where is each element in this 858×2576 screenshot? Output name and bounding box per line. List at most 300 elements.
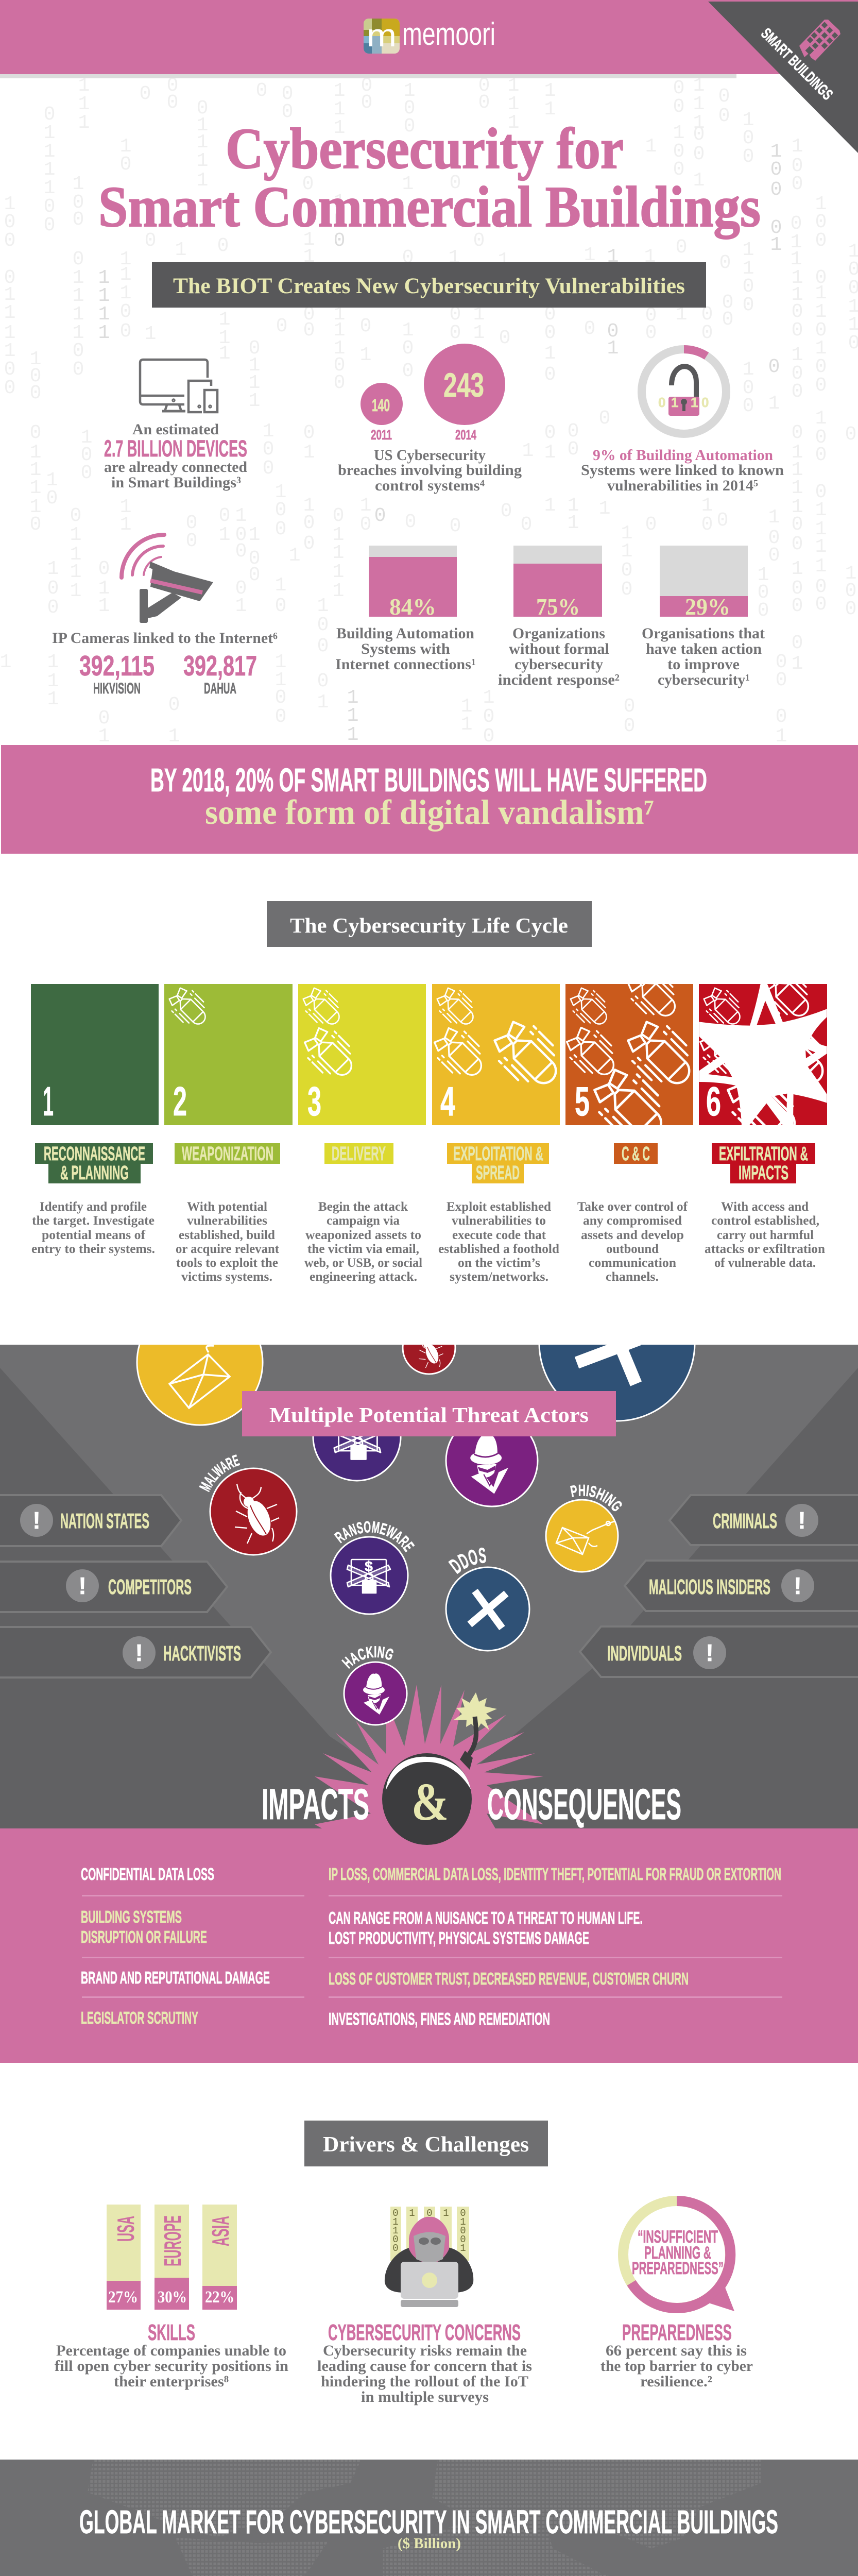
- row: legislator scrutiny: [81, 2008, 550, 2028]
- logo: memoori: [364, 16, 495, 54]
- tag: nation states: [0, 1495, 181, 1546]
- tag: nation states: NATION STATES: [60, 1509, 149, 1533]
- tag: hacktivists: HACKTIVISTS: [163, 1641, 241, 1665]
- binary code background: 0111100: [4, 267, 15, 399]
- panel: 6 exfiltration: of vulnerable data.: [714, 1256, 816, 1270]
- panel: 1 reconnaissance: entry to their systems.: [31, 1242, 155, 1256]
- tag: hacktivists: !: [135, 1639, 143, 1666]
- bar: no incident response 75%: 75%: [536, 594, 580, 620]
- binary code background: 0: [302, 173, 314, 195]
- panel: 5 command and control: Take over control of: [577, 1200, 688, 1214]
- panel: preparedness: the top barrier to cyber: [600, 2358, 753, 2375]
- panel: 6 exfiltration: control established,: [711, 1214, 819, 1228]
- binary code background: 0111100: [792, 422, 803, 555]
- binary code background: 1: [498, 249, 509, 272]
- binary code background: 011110: [30, 422, 41, 536]
- binary code background: 0: [334, 230, 345, 252]
- binary code background: 0111100: [815, 481, 827, 616]
- chart: skills bars: USA: [112, 2216, 139, 2242]
- binary code background: 0111100: [73, 248, 84, 381]
- binary code background: 0: [584, 318, 595, 340]
- panel: 4 exploitation: EXPLOITATION &: [453, 1143, 543, 1165]
- panel: 4 exploitation: vulnerabilities to: [452, 1214, 546, 1228]
- binary code background: 00: [167, 75, 178, 114]
- panel: preparedness: PREPAREDNESS: [622, 2320, 732, 2345]
- heading: impacts and consequences: [262, 1772, 681, 1832]
- binary code background: 10001: [770, 141, 782, 256]
- bar: taken action 29%: have taken action: [646, 640, 762, 657]
- binary code background: 100: [743, 109, 754, 168]
- threat: hacking circle behind title: [446, 1415, 538, 1506]
- banner: digital vandalism: some form of digital vandalism⁷: [205, 792, 654, 832]
- bar: no incident response 75%: cybersecurity: [514, 656, 603, 673]
- tag: individuals: [580, 1626, 858, 1677]
- panel: threat actors section: [0, 1345, 858, 1828]
- row: building systems disruption: DISRUPTION OR FAILURE: [81, 1927, 207, 1946]
- stat: building automation lock gauge: 9% of Building Automation: [593, 447, 773, 464]
- heading: threat actors: [242, 1391, 616, 1436]
- binary code background: 111: [78, 75, 90, 134]
- panel: 4 exploitation: [428, 984, 570, 1284]
- icon: hacker with laptop: 1: [409, 2208, 415, 2219]
- bar: no incident response 75%: Organizations: [512, 625, 605, 642]
- threat: top malware circle: [402, 1345, 456, 1375]
- binary code background: 1: [402, 173, 414, 195]
- panel: 3 delivery: the victim via email,: [307, 1242, 419, 1256]
- chart: skills bars: 22%: [205, 2288, 234, 2307]
- panel: 3 delivery: Begin the attack: [318, 1200, 408, 1214]
- binary code background: 1: [0, 651, 11, 673]
- binary code background: 1: [645, 135, 657, 158]
- threat: hacking: HACKING: [341, 1646, 393, 1669]
- binary code background: 1: [544, 495, 556, 517]
- threat: ddos: DDOS: [448, 1548, 486, 1574]
- stat: IP cameras: 392,817: [183, 650, 257, 682]
- binary code background: 0: [374, 505, 386, 527]
- binary code background: 0: [499, 327, 510, 349]
- binary code background: 0: [676, 236, 687, 259]
- title: Smart Commercial Buildings: [98, 175, 761, 239]
- corner tab: smart buildings: [708, 2, 858, 153]
- stat: breaches bubble chart: US Cybersecurity: [374, 447, 486, 464]
- bar: no incident response 75%: [498, 546, 620, 688]
- binary code background: 0: [450, 172, 461, 194]
- binary code background: 1: [584, 244, 595, 266]
- panel: cybersecurity concerns: hindering the rollout of the IoT: [321, 2373, 528, 2390]
- row: legislator scrutiny: LEGISLATOR SCRUTINY: [81, 2008, 198, 2027]
- binary code background: 01111: [333, 505, 344, 602]
- panel: 5 command and control: channels.: [606, 1270, 659, 1284]
- panel: 4 exploitation: established a foothold: [438, 1242, 559, 1256]
- panel: 6 exfiltration: IMPACTS: [739, 1162, 788, 1184]
- icon: speech bubble: PLANNING &: [644, 2243, 711, 2263]
- binary code background: 11: [568, 495, 579, 534]
- binary code background: 01: [168, 694, 180, 748]
- binary code background: 111: [334, 80, 345, 139]
- panel: 6 exfiltration: 6: [706, 1078, 721, 1124]
- panel: skills: their enterprises⁸: [114, 2373, 229, 2390]
- heading: life cycle: The Cybersecurity Life Cycle: [290, 913, 568, 937]
- threat: hacking: [341, 1646, 408, 1726]
- row: building systems disruption: CAN RANGE FROM A NUISANCE TO A THREAT TO HUMAN LIFE.: [329, 1908, 643, 1927]
- logo: memoori: memoori: [402, 16, 495, 52]
- binary code background: 10010: [275, 481, 286, 617]
- panel: 6 exfiltration: With access and: [721, 1200, 809, 1214]
- binary code background: 01: [360, 315, 371, 366]
- binary code background: 00: [645, 304, 657, 344]
- bar: internet connections 84%: Internet connections¹: [335, 656, 476, 673]
- tag: nation states: !: [32, 1507, 41, 1534]
- tag: criminals: [670, 1495, 858, 1545]
- panel: 1 reconnaissance: potential means of: [42, 1228, 146, 1242]
- binary code background: 00100: [673, 77, 684, 181]
- binary code background: 0: [402, 247, 414, 269]
- binary code background: 11100: [120, 248, 131, 343]
- binary code background: 1100100: [792, 267, 803, 403]
- panel: 4 exploitation: Exploit established: [447, 1200, 551, 1214]
- panel: 2 weaponization: With potential: [187, 1200, 267, 1214]
- threat: top ddos circle: [539, 1345, 695, 1422]
- heading: BIOT vulnerabilities: [152, 262, 706, 308]
- threat: malware: [199, 1454, 298, 1556]
- binary code background: 01111: [197, 97, 208, 192]
- binary code background: 0: [276, 315, 287, 337]
- binary code background: 1: [449, 247, 460, 269]
- tag: malicious insiders: [625, 1561, 858, 1611]
- binary code background: 0: [768, 356, 780, 378]
- panel: 3 delivery: engineering attack.: [310, 1270, 417, 1284]
- panel: global market: ($ Billion): [398, 2536, 461, 2552]
- binary code background: 100: [317, 595, 329, 657]
- row: brand damage: BRAND AND REPUTATIONAL DAMAGE: [81, 1968, 270, 1987]
- binary code background: 11: [461, 696, 472, 736]
- binary code background: 100: [815, 193, 827, 252]
- binary code background: 00: [624, 696, 635, 737]
- binary code background: 10001: [235, 505, 247, 617]
- binary code background: 00: [361, 75, 372, 114]
- binary code background: 111: [508, 75, 519, 134]
- binary code background: 100: [4, 193, 15, 252]
- binary code background: 111001: [693, 75, 705, 192]
- panel: skills: [55, 2205, 288, 2390]
- icon: hacker with laptop: 01001: [460, 2208, 466, 2254]
- binary code background: 0: [145, 230, 156, 252]
- tag: competitors: !: [78, 1572, 87, 1599]
- binary code background: 100: [402, 319, 414, 382]
- stat: breaches bubble chart: control systems⁴: [375, 477, 485, 494]
- heading: BIOT vulnerabilities: The BIOT Creates New Cybersecurity Vulnerabilities: [173, 274, 685, 298]
- bar: taken action 29%: to improve: [667, 656, 740, 673]
- panel: 5 command and control: outbound: [606, 1242, 659, 1256]
- panel: cybersecurity concerns: in multiple surveys: [361, 2388, 489, 2405]
- heading: impacts and consequences: IMPACTS: [262, 1780, 369, 1828]
- threat: ransomware: $: [365, 1558, 373, 1574]
- binary code background: 0100: [743, 294, 754, 417]
- binary code background: 100: [263, 420, 274, 480]
- stat: breaches bubble chart: 243: [443, 366, 484, 404]
- binary code background: 1: [175, 239, 186, 261]
- panel: cybersecurity concerns: leading cause for concern that is: [317, 2358, 532, 2375]
- stat: connected devices: [104, 360, 247, 491]
- binary code background: 0111100: [44, 104, 55, 236]
- threat: ddos: [445, 1548, 530, 1652]
- panel: 5 command and control: C & C: [622, 1143, 650, 1165]
- binary code background: 00: [478, 75, 490, 114]
- panel: preparedness: [600, 2201, 753, 2390]
- binary code background: 00: [303, 303, 315, 342]
- binary code background: 10: [701, 495, 713, 536]
- panel: 4 exploitation: on the victim’s: [458, 1256, 540, 1270]
- panel: 6 exfiltration: carry out harmful: [717, 1228, 814, 1242]
- heading: impacts and consequences: CONSEQUENCES: [487, 1780, 681, 1828]
- stat: building automation lock gauge: 0: [701, 395, 709, 410]
- world map pattern: [88, 2460, 761, 2576]
- panel: 2 weaponization: WEAPONIZATION: [182, 1143, 273, 1165]
- stat: building automation lock gauge: vulnerabilities in 2014⁵: [607, 477, 758, 494]
- stat: building automation lock gauge: 0: [658, 395, 665, 410]
- tag: criminals: !: [798, 1507, 806, 1534]
- panel: 4 exploitation: 4: [440, 1078, 455, 1124]
- stat: building automation lock gauge: Systems were linked to known: [581, 462, 784, 479]
- binary code background: 11: [120, 496, 131, 536]
- binary code background: 1: [768, 393, 780, 415]
- heading: life cycle: [267, 901, 592, 947]
- icon: speech bubble: “INSUFFICIENT: [638, 2227, 718, 2247]
- panel: 5 command and control: any compromised: [583, 1214, 682, 1228]
- binary code background: 01: [544, 422, 556, 464]
- panel: 2 weaponization: [164, 984, 293, 1284]
- binary code background: 11: [544, 80, 556, 121]
- icon: camera: [122, 535, 213, 623]
- panel: cybersecurity concerns: Cybersecurity risks remain the: [323, 2342, 527, 2359]
- panel: 5 command and control: communication: [589, 1256, 676, 1270]
- panel: 5 command and control: [565, 984, 693, 1281]
- binary code background: 100: [73, 173, 84, 231]
- binary code background: 1: [145, 323, 156, 345]
- stat: breaches bubble chart: [338, 344, 522, 494]
- tag: individuals: !: [706, 1639, 714, 1666]
- binary code background: 100: [303, 495, 315, 555]
- binary code background: 011: [98, 558, 110, 617]
- panel: 1 reconnaissance: & PLANNING: [60, 1162, 129, 1184]
- row: building systems disruption: [81, 1907, 782, 1958]
- binary code background: 01: [303, 422, 315, 464]
- binary code background: 01111: [70, 505, 81, 602]
- bar: taken action 29%: 29%: [685, 594, 730, 620]
- panel: 2 weaponization: established, build: [179, 1228, 275, 1242]
- binary code background: 100: [758, 564, 769, 622]
- bar: taken action 29%: cybersecurity¹: [658, 671, 750, 688]
- chart: skills bars: [107, 2205, 237, 2310]
- panel: impacts and consequences: [0, 1692, 858, 2063]
- threat: phishing: [545, 1485, 622, 1572]
- binary code background: 100: [792, 135, 803, 195]
- stat: breaches bubble chart: breaches involving building: [338, 462, 522, 479]
- binary code background: 100: [249, 524, 260, 586]
- binary code background: 1100: [743, 239, 754, 316]
- stat: IP cameras: 392,115: [79, 650, 155, 682]
- bar: taken action 29%: [642, 546, 765, 688]
- bar: taken action 29%: Organisations that: [642, 625, 765, 642]
- panel: skills: fill open cyber security positions in: [55, 2358, 288, 2375]
- binary code background: 00: [722, 292, 733, 331]
- binary code background: 10: [334, 191, 345, 231]
- binary code background: 00: [450, 303, 461, 344]
- panel: 1 reconnaissance: the target. Investigate: [32, 1214, 155, 1228]
- threat: ransomware circle behind title: [313, 1393, 401, 1481]
- icon: building: [799, 20, 840, 61]
- panel: 6 exfiltration: [699, 984, 827, 1267]
- heading: impacts and consequences: &: [411, 1772, 449, 1832]
- panel: 2 weaponization: 2: [173, 1078, 187, 1124]
- binary code background: 0111: [249, 337, 260, 412]
- icon: hacker with laptop: [385, 2207, 473, 2307]
- panel: 5 command and control: assets and develop: [581, 1228, 684, 1242]
- stat: connected devices: An estimated: [132, 421, 219, 438]
- panel: 3 delivery: 3: [307, 1078, 321, 1124]
- threat: ransomware: [330, 1521, 415, 1615]
- panel: 5 command and control: 5: [575, 1078, 590, 1124]
- threat: malware: MALWARE: [199, 1454, 240, 1492]
- binary code background: 0010: [544, 303, 556, 386]
- stat: connected devices: in Smart Buildings³: [111, 474, 241, 491]
- binary code background: 0: [473, 230, 485, 252]
- binary code background: 1: [522, 440, 534, 462]
- bar: no incident response 75%: incident response²: [498, 671, 620, 688]
- binary code background: 0100: [845, 423, 856, 620]
- panel: 2 weaponization: victims systems.: [181, 1270, 272, 1284]
- binary code background: 100: [768, 506, 780, 567]
- row: building systems disruption: BUILDING SYSTEMS: [81, 1907, 182, 1926]
- tag: competitors: [0, 1562, 227, 1612]
- header band: [0, 0, 858, 153]
- binary code background: 1: [644, 246, 656, 268]
- binary code background: 111: [347, 687, 358, 746]
- stat: IP cameras: HIKVISION: [93, 680, 141, 697]
- binary code background: 100: [483, 687, 494, 748]
- panel: cybersecurity concerns: CYBERSECURITY CONCERNS: [328, 2320, 521, 2345]
- binary code background: 0: [501, 500, 512, 522]
- binary code background: 11: [473, 303, 485, 344]
- binary code background: [0, 75, 858, 748]
- binary code background: 0110100: [815, 267, 827, 397]
- bar: internet connections 84%: 84%: [389, 594, 436, 620]
- panel: preparedness: 66 percent say this is: [606, 2342, 747, 2359]
- heading: drivers and challenges: [304, 2121, 548, 2166]
- bar: no incident response 75%: without formal: [509, 640, 609, 657]
- binary code background: 0: [719, 252, 731, 274]
- icon: devices: [140, 360, 217, 412]
- binary code background: 0: [717, 510, 728, 532]
- stat: IP cameras: DAHUA: [204, 680, 236, 697]
- panel: 1 reconnaissance: 1: [43, 1078, 54, 1124]
- panel: 3 delivery: campaign via: [327, 1214, 400, 1228]
- icon: speech bubble: [623, 2201, 734, 2311]
- panel: global market: [0, 2460, 858, 2576]
- binary code background: 1100: [621, 522, 632, 601]
- logo: memoori: m: [367, 18, 397, 54]
- binary code background: 1: [676, 303, 687, 326]
- binary code background: 00: [701, 303, 713, 344]
- binary code background: 100: [47, 558, 59, 619]
- title: Cybersecurity for: [226, 117, 624, 181]
- binary code background: 10: [46, 469, 58, 510]
- chart: skills bars: ASIA: [207, 2216, 234, 2246]
- panel: preparedness: resilience.²: [640, 2373, 712, 2390]
- stat: building automation lock gauge: [581, 349, 784, 494]
- row: legislator scrutiny: INVESTIGATIONS, FINES AND REMEDIATION: [329, 2009, 550, 2028]
- panel: 3 delivery: [298, 984, 426, 1284]
- binary code background: 10: [360, 495, 371, 536]
- banner: digital vandalism: [1, 745, 858, 854]
- tag: individuals: INDIVIDUALS: [607, 1641, 682, 1665]
- binary code background: 1: [607, 246, 619, 268]
- icon: hacker with laptop: 0: [426, 2208, 433, 2219]
- stat: connected devices: 2.7 BILLION DEVICES: [104, 435, 247, 462]
- binary code background: 111: [219, 309, 230, 365]
- binary code background: 01: [317, 670, 329, 714]
- panel: 4 exploitation: system/networks.: [450, 1270, 548, 1284]
- binary code background: 0: [405, 511, 416, 533]
- binary code background: 1100: [275, 651, 286, 728]
- icon: speech bubble: PREPAREDNESS”: [632, 2259, 724, 2278]
- bar: internet connections 84%: [335, 546, 476, 673]
- panel: 1 reconnaissance: Identify and profile: [40, 1200, 147, 1214]
- row: brand damage: [81, 1968, 782, 1998]
- binary code background: 011: [791, 213, 802, 270]
- panel: skills: SKILLS: [148, 2320, 195, 2345]
- icon: burst: [315, 1685, 543, 1844]
- panel: cybersecurity concerns: [317, 2207, 532, 2405]
- panel: 1 reconnaissance: [31, 984, 159, 1256]
- stat: building automation lock gauge: 1: [671, 395, 678, 410]
- stat: connected devices: are already connected: [104, 459, 247, 476]
- binary code background: 0: [140, 83, 151, 105]
- binary code background: 100: [815, 408, 827, 466]
- panel: skills: Percentage of companies unable to: [56, 2342, 286, 2359]
- threat: phishing: PHISHING: [570, 1485, 622, 1512]
- icon: hacker with laptop: 01100: [392, 2208, 399, 2254]
- tag: criminals: CRIMINALS: [713, 1509, 777, 1533]
- binary code background: 1111: [98, 267, 110, 344]
- binary code background: 01: [219, 505, 230, 546]
- icon: hacker with laptop: 1: [443, 2208, 449, 2219]
- binary code background: 0: [217, 235, 229, 257]
- binary code background: 100: [30, 348, 41, 404]
- binary code background: 0: [450, 515, 461, 537]
- stat: breaches bubble chart: 2014: [455, 427, 476, 443]
- binary code background: 0: [256, 80, 267, 102]
- icon: bomb: [382, 1692, 497, 1845]
- binary code background: 0: [521, 514, 532, 536]
- binary code background: 01: [98, 707, 110, 748]
- panel: 2 weaponization: tools to exploit the: [176, 1256, 278, 1270]
- heading: threat actors: Multiple Potential Threat Actors: [269, 1403, 589, 1427]
- chart: skills bars: 30%: [158, 2288, 187, 2307]
- stat: breaches bubble chart: 2011: [371, 427, 392, 443]
- stat: breaches bubble chart: 140: [372, 396, 390, 415]
- bar: internet connections 84%: Systems with: [361, 640, 450, 657]
- binary code background: 11100: [334, 303, 345, 394]
- binary code background: 100: [81, 427, 92, 484]
- title: [98, 117, 761, 239]
- panel: 3 delivery: DELIVERY: [332, 1143, 386, 1165]
- threat: ransomware: RANSOMEWARE: [334, 1521, 415, 1553]
- binary code background: 1: [289, 545, 300, 567]
- panel: 6 exfiltration: attacks or exfiltration: [705, 1242, 825, 1256]
- chart: skills bars: 27%: [108, 2288, 138, 2307]
- binary code background: 00: [568, 420, 579, 461]
